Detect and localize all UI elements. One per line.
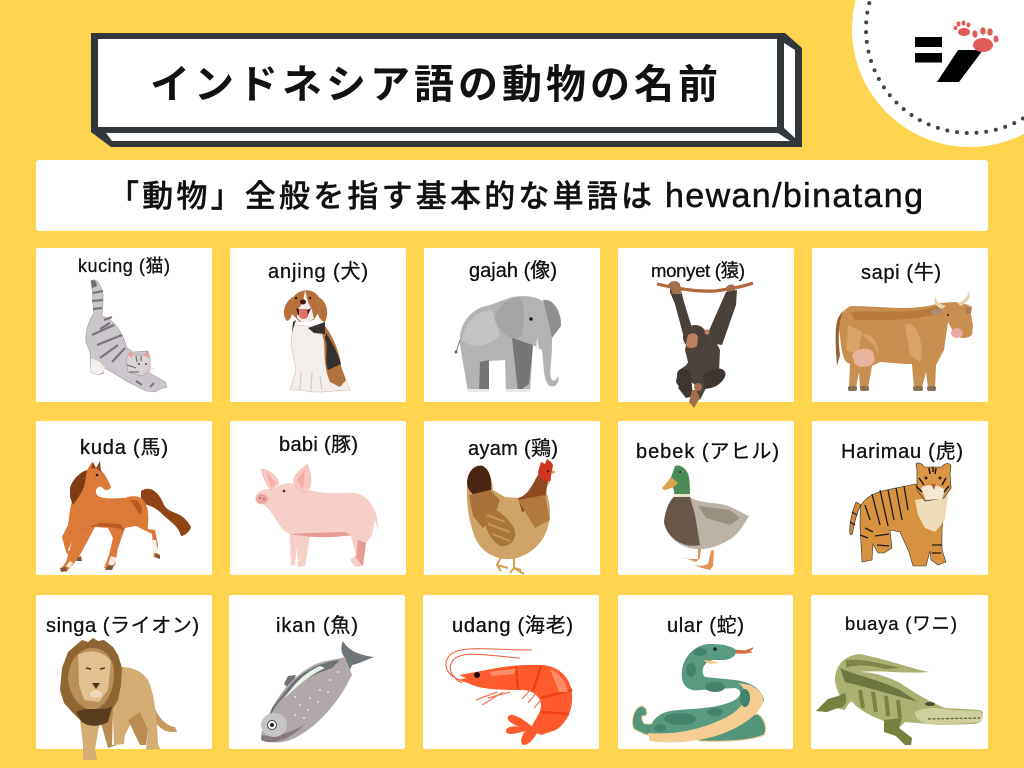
- illustration: pig: [255, 464, 378, 567]
- panel: buaya crocodile: [811, 595, 988, 749]
- label: singa: singa (ライオン): [46, 615, 199, 637]
- illustration: cow: [836, 291, 973, 391]
- panel: bebek duck: [618, 421, 794, 575]
- title banner: [91, 33, 802, 147]
- panel: singa lion: [36, 595, 212, 760]
- label: sapi: sapi (牛): [861, 261, 941, 284]
- label: harimau: Harimau (虎): [841, 440, 963, 463]
- panel: ular snake: [618, 595, 793, 749]
- subtitle text: hewan/binatang: [665, 177, 923, 215]
- illustration: cat: [86, 280, 167, 392]
- illustration: monkey: [657, 281, 753, 408]
- title text: インドネシア語の動物の名前: [150, 63, 718, 107]
- label: udang: udang (海老): [452, 614, 573, 637]
- illustration: elephant: [454, 296, 561, 392]
- logo badge: [852, 0, 1024, 147]
- illustration: snake: [632, 644, 766, 742]
- illustration: shrimp: [446, 649, 572, 745]
- label: monyet: monyet (猿): [651, 260, 745, 281]
- panel: kucing cat: [36, 248, 212, 402]
- label: ayam: ayam (鶏): [468, 437, 558, 460]
- panel: harimau tiger: [812, 421, 988, 575]
- subtitle panel: [36, 160, 988, 231]
- illustration: fish: [261, 641, 374, 742]
- panel: gajah elephant: [424, 248, 600, 402]
- illustration: crocodile: [816, 654, 983, 745]
- panel: monyet monkey: [618, 248, 794, 408]
- label: ular: ular (蛇): [667, 614, 744, 637]
- illustration: tiger: [850, 463, 951, 566]
- label: kucing: kucing (猫): [78, 256, 170, 276]
- illustration: chicken: [467, 459, 556, 574]
- label: bebek: bebek (アヒル): [636, 441, 779, 463]
- panel: ikan fish: [229, 595, 405, 749]
- label: ikan: ikan (魚): [276, 614, 358, 637]
- subtitle text: 「動物」全般を指す基本的な単語は: [108, 179, 652, 214]
- panel: udang shrimp: [423, 595, 599, 749]
- panel: babi pig: [230, 421, 406, 575]
- illustration: lion: [60, 638, 177, 760]
- panel: ayam chicken: [424, 421, 600, 575]
- label: anjing: anjing (犬): [268, 260, 368, 283]
- label: babi: babi (豚): [279, 434, 358, 456]
- illustration: horse: [60, 461, 191, 572]
- label: gajah: gajah (像): [469, 259, 557, 282]
- illustration: dog: [284, 290, 350, 392]
- label: kuda: kuda (馬): [80, 437, 168, 459]
- panel: sapi cow: [812, 248, 988, 402]
- illustration: duck: [662, 465, 749, 570]
- panel: anjing dog: [230, 248, 406, 402]
- panel: kuda horse: [36, 421, 212, 575]
- label: buaya: buaya (ワニ): [845, 613, 957, 634]
